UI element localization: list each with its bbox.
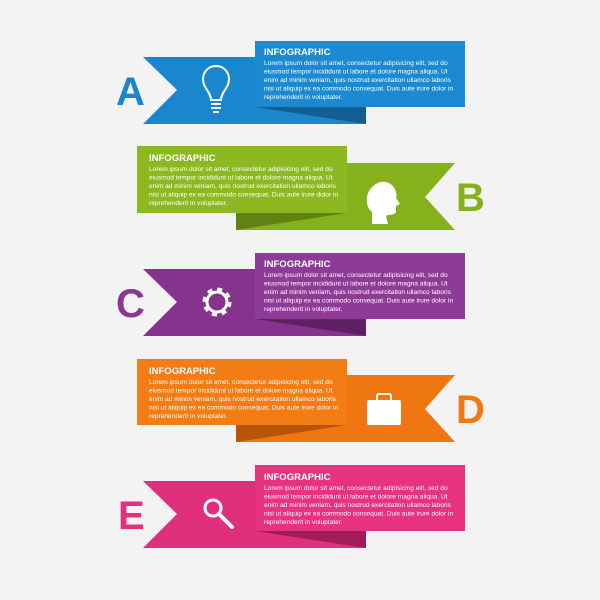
text box D: reprehenderit in voluptater.: [149, 413, 228, 420]
text box B: reprehenderit in voluptater.: [149, 200, 228, 207]
letter D: D: [456, 388, 485, 432]
text box C: reprehenderit in voluptater.: [264, 306, 343, 313]
text box A: nisi ut aliquip ex ea commodo consequat. Duis aute irure dolor in: [264, 86, 453, 92]
text box E: INFOGRAPHIC: [264, 472, 331, 483]
text box A: enim ad minim veniam, quis nostrud exercitation ullamco laboris: [264, 77, 452, 84]
row A: [116, 41, 465, 124]
text box E: [255, 465, 465, 531]
text box D: [137, 359, 347, 425]
text box D: enim ad minim veniam, quis nostrud exercitation ullamco laboris: [149, 396, 337, 403]
text box C: [255, 253, 465, 319]
row E: [118, 465, 465, 548]
text box C: Lorem ipsum dolor sit amet, consectetur adipisicing elit, sed do: [264, 272, 448, 279]
text box B: Lorem ipsum dolor sit amet, consectetur adipisicing elit, sed do: [149, 166, 333, 173]
text box C: INFOGRAPHIC: [264, 259, 331, 270]
letter B: B: [456, 176, 485, 220]
text box B: nisi ut aliquip ex ea commodo consequat. Duis aute irure dolor in: [149, 192, 338, 198]
text box E: enim ad minim veniam, quis nostrud exercitation ullamco laboris: [264, 502, 452, 509]
letter E: E: [118, 494, 145, 538]
text box C: nisi ut aliquip ex ea commodo consequat. Duis aute irure dolor in: [264, 298, 453, 304]
text box E: nisi ut aliquip ex ea commodo consequat. Duis aute irure dolor in: [264, 510, 453, 518]
text box A: Lorem ipsum dolor sit amet, consectetur adipisicing elit, sed do: [264, 60, 448, 67]
text box A: INFOGRAPHIC: [264, 47, 331, 58]
text box D: eiusmod tempor incididunt ut labore et dolore magna aliqua. Ut: [149, 388, 333, 394]
row B: [137, 146, 485, 230]
text box B: INFOGRAPHIC: [149, 153, 216, 164]
text box C: eiusmod tempor incididunt ut labore et dolore magna aliqua. Ut: [264, 280, 448, 288]
text box B: eiusmod tempor incididunt ut labore et dolore magna aliqua. Ut: [149, 174, 333, 182]
letter C: C: [116, 282, 145, 326]
text box D: nisi ut aliquip ex ea commodo consequat. Duis aute irure dolor in: [149, 404, 338, 412]
text box C: enim ad minim veniam, quis nostrud exercitation ullamco laboris: [264, 289, 452, 296]
text box D: Lorem ipsum dolor sit amet, consectetur adipisicing elit, sed do: [149, 379, 333, 386]
text box E: eiusmod tempor incididunt ut labore et dolore magna aliqua. Ut: [264, 494, 448, 500]
text box B: enim ad minim veniam, quis nostrud exercitation ullamco laboris: [149, 183, 337, 190]
icon: briefcase: [367, 394, 401, 425]
text box B: [137, 146, 347, 213]
text box A: [255, 41, 465, 107]
letter A: A: [116, 70, 145, 114]
row D: [137, 359, 485, 442]
icon: head: [367, 182, 400, 224]
text box A: eiusmod tempor incididunt ut labore et dolore magna aliqua. Ut: [264, 68, 448, 76]
text box E: reprehenderit in voluptater.: [264, 519, 343, 526]
text box E: Lorem ipsum dolor sit amet, consectetur adipisicing elit, sed do: [264, 485, 448, 492]
icon: gear: [205, 290, 229, 314]
icon: bulb: [203, 66, 229, 112]
icon: magnifier: [205, 500, 232, 527]
row C: [116, 253, 465, 336]
text box A: reprehenderit in voluptater.: [264, 94, 343, 101]
text box D: INFOGRAPHIC: [149, 366, 216, 377]
